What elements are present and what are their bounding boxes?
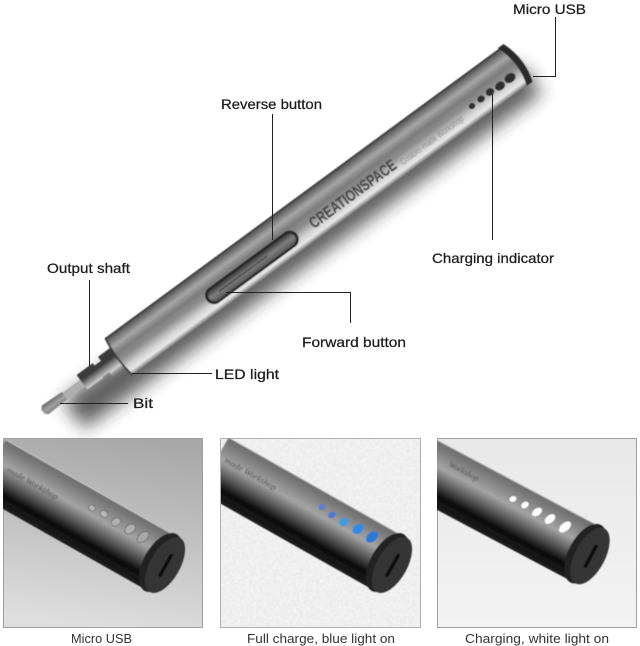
panel: Full charge, blue light on	[220, 438, 421, 628]
panel: Charging, white light on: Workshop	[447, 459, 481, 483]
brand text on pen	[306, 114, 465, 232]
label: Output shaft: Output shaft	[47, 260, 130, 276]
LED ring	[104, 338, 132, 376]
label: Bit: Bit	[133, 395, 153, 411]
panel: Full charge, blue light on: made Workshop	[223, 455, 278, 492]
caption: Full charge, blue light on: Full charge, blue light on	[247, 631, 395, 646]
USB end cap	[498, 41, 535, 86]
label: Reverse button: Reverse button	[221, 96, 322, 112]
brand text on pen: CREATIONSPACE	[306, 157, 400, 232]
brand text on pen: Custom-made Workshop	[398, 114, 465, 167]
label: Charging indicator: Charging indicator	[432, 250, 554, 266]
label: LED light: LED light	[215, 366, 279, 382]
panel: Charging, white light on	[437, 438, 637, 628]
charging indicator holes	[468, 71, 517, 110]
panel: Micro USB	[0, 438, 202, 628]
label: Forward button: Forward button	[302, 334, 406, 350]
main product: screwdriver pen	[29, 41, 535, 431]
button slot	[201, 227, 302, 308]
label: Micro USB: Micro USB	[513, 1, 586, 17]
caption: Micro USB: Micro USB	[71, 631, 132, 646]
leader lines	[60, 17, 556, 404]
output shaft	[75, 347, 126, 393]
caption: Charging, white light on: Charging, white light on	[465, 631, 609, 646]
body	[104, 45, 531, 376]
pen shadow	[63, 64, 542, 429]
bit	[39, 378, 85, 416]
panel: Micro USB: made Workshop	[5, 464, 60, 501]
